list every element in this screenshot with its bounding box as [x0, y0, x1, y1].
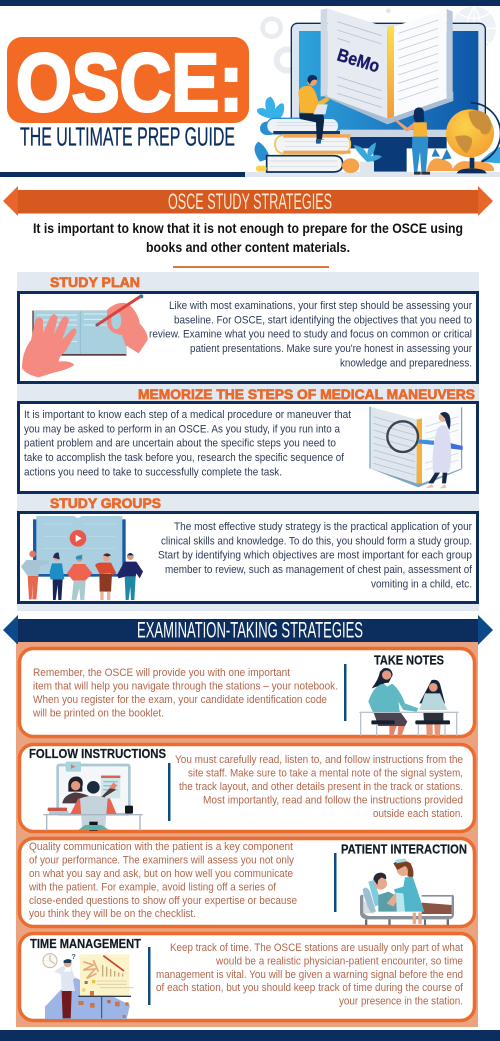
icon: confused manager with chart and clock — [43, 952, 133, 1019]
hero illustration: book, monitor and readers — [255, 6, 500, 175]
study plan section: STUDY PLAN — [50, 274, 140, 290]
study groups section: member to review, such as management of chest pain, assessment of — [165, 564, 473, 576]
study plan section: patient presentations. Make sure you're honest in assessing your — [190, 343, 472, 355]
study plan section — [18, 274, 478, 382]
card: patient interaction: with the patient. For example, avoid listing off a series of — [28, 882, 277, 894]
top bar — [0, 0, 500, 6]
study groups section — [18, 495, 478, 602]
icon: teacher and student at a desk — [359, 668, 459, 736]
memorize section: patient problem and are uncertain about the specific steps you need to — [24, 438, 336, 450]
card: follow instructions: the track layout, and other details present in the track or stations. — [179, 781, 463, 793]
title: OSCE: — [16, 38, 243, 128]
bottom bar — [0, 1030, 500, 1041]
card: time management: your presence in the station. — [339, 996, 463, 1008]
study plan section: baseline. For OSCE, start identifying the objectives that you need to — [174, 314, 472, 326]
intro text: books and other content materials. — [146, 240, 350, 255]
card: time management: management is vital. You will be given a warning signal before the end — [156, 969, 463, 981]
card: follow instructions: Most importantly, read and follow the instructions provided — [203, 794, 463, 806]
memorize section — [18, 386, 478, 492]
intro text — [33, 221, 463, 255]
section banner: OSCE study strategies: OSCE STUDY STRATEGIES — [168, 189, 332, 214]
card: take notes: item that will help you navigate through the stations – your notebook. — [33, 680, 338, 692]
icon: presenter on screen and viewer — [43, 762, 143, 831]
memorize section: It is important to know each step of a medical procedure or maneuver that — [24, 409, 351, 421]
icon: confused manager with chart and clock: ? — [71, 952, 76, 961]
memorize section: you may be asked to perform in an OSCE. As you study, if you run into a — [24, 423, 341, 435]
card: patient interaction — [20, 838, 474, 926]
memorize section: take to accomplish the task before you, research the specific sequence of — [24, 452, 345, 464]
section banner: examination-taking strategies — [3, 615, 493, 646]
card: take notes: Remember, the OSCE will provide you with one important — [33, 667, 290, 679]
study groups section: clinical skills and knowledge. To do this, you should form a study group. — [161, 535, 472, 547]
section banner: OSCE study strategies — [3, 186, 493, 216]
card: follow instructions: FOLLOW INSTRUCTIONS — [29, 747, 166, 761]
card: time management — [20, 934, 474, 1020]
icon: nurse and patient in bed — [360, 858, 454, 925]
card: take notes: TAKE NOTES — [374, 654, 444, 668]
card: time management: TIME MANAGEMENT — [30, 937, 141, 951]
study groups section: STUDY GROUPS — [50, 495, 161, 511]
card: patient interaction: on what you say and ask, but on how well you communicate — [29, 868, 293, 880]
card: follow instructions: You must carefully read, listen to, and follow instructions from the — [175, 754, 463, 766]
card: time management: of each station, but you should keep track of time during the course of — [156, 982, 464, 994]
card: follow instructions: outside each station. — [373, 808, 463, 820]
card: patient interaction: PATIENT INTERACTION — [341, 842, 467, 856]
study groups section: The most effective study strategy is the practical application of your — [174, 521, 472, 533]
card: take notes: will be printed on the booklet. — [32, 708, 164, 720]
title: THE ULTIMATE PREP GUIDE — [20, 122, 235, 152]
study plan section: review. Examine what you need to study and focus on common or critical — [149, 329, 472, 341]
memorize section: MEMORIZE THE STEPS OF MEDICAL MANEUVERS — [138, 386, 475, 402]
card: follow instructions: site staff. Make sure to take a mental note of the signal system, — [188, 768, 463, 780]
panel: examination strategies — [16, 644, 478, 1027]
card: patient interaction: Quality communication with the patient is a key component — [29, 841, 293, 853]
card: take notes: When you register for the exam, your candidate identification code — [33, 694, 327, 706]
panel: study strategies — [17, 272, 479, 611]
card: patient interaction: of your performance. The examiners will assess you not only — [29, 854, 294, 866]
card: time management: would be a realistic physician-patient encounter, so time — [215, 956, 463, 968]
icon: doctor with magnifier and book — [370, 407, 463, 488]
icon: hands on a book — [22, 294, 148, 377]
hero illustration: book, monitor and readers: BeMo — [335, 45, 382, 76]
card: patient interaction: you think they will be on the checklist. — [29, 908, 196, 920]
study groups section: Start by identifying which objectives are most important for each group — [158, 550, 472, 562]
intro text: It is important to know that it is not enough to prepare for the OSCE using — [33, 221, 463, 236]
card: take notes — [20, 648, 474, 736]
study plan section: Like with most examinations, your first step should be assessing your — [169, 300, 472, 312]
icon: study group with video book — [21, 516, 143, 600]
card: time management: Keep track of time. The OSCE stations are usually only part of what — [170, 942, 463, 954]
study plan section: knowledge and preparedness. — [340, 357, 472, 369]
card: follow instructions — [20, 744, 474, 832]
divider rule — [173, 266, 329, 268]
memorize section: actions you need to take to successfully complete the task. — [24, 466, 282, 478]
study groups section: vomiting in a child, etc. — [371, 578, 472, 590]
header rule — [0, 172, 500, 177]
card: patient interaction: close-ended questions to show off your expertise or because — [29, 895, 297, 907]
